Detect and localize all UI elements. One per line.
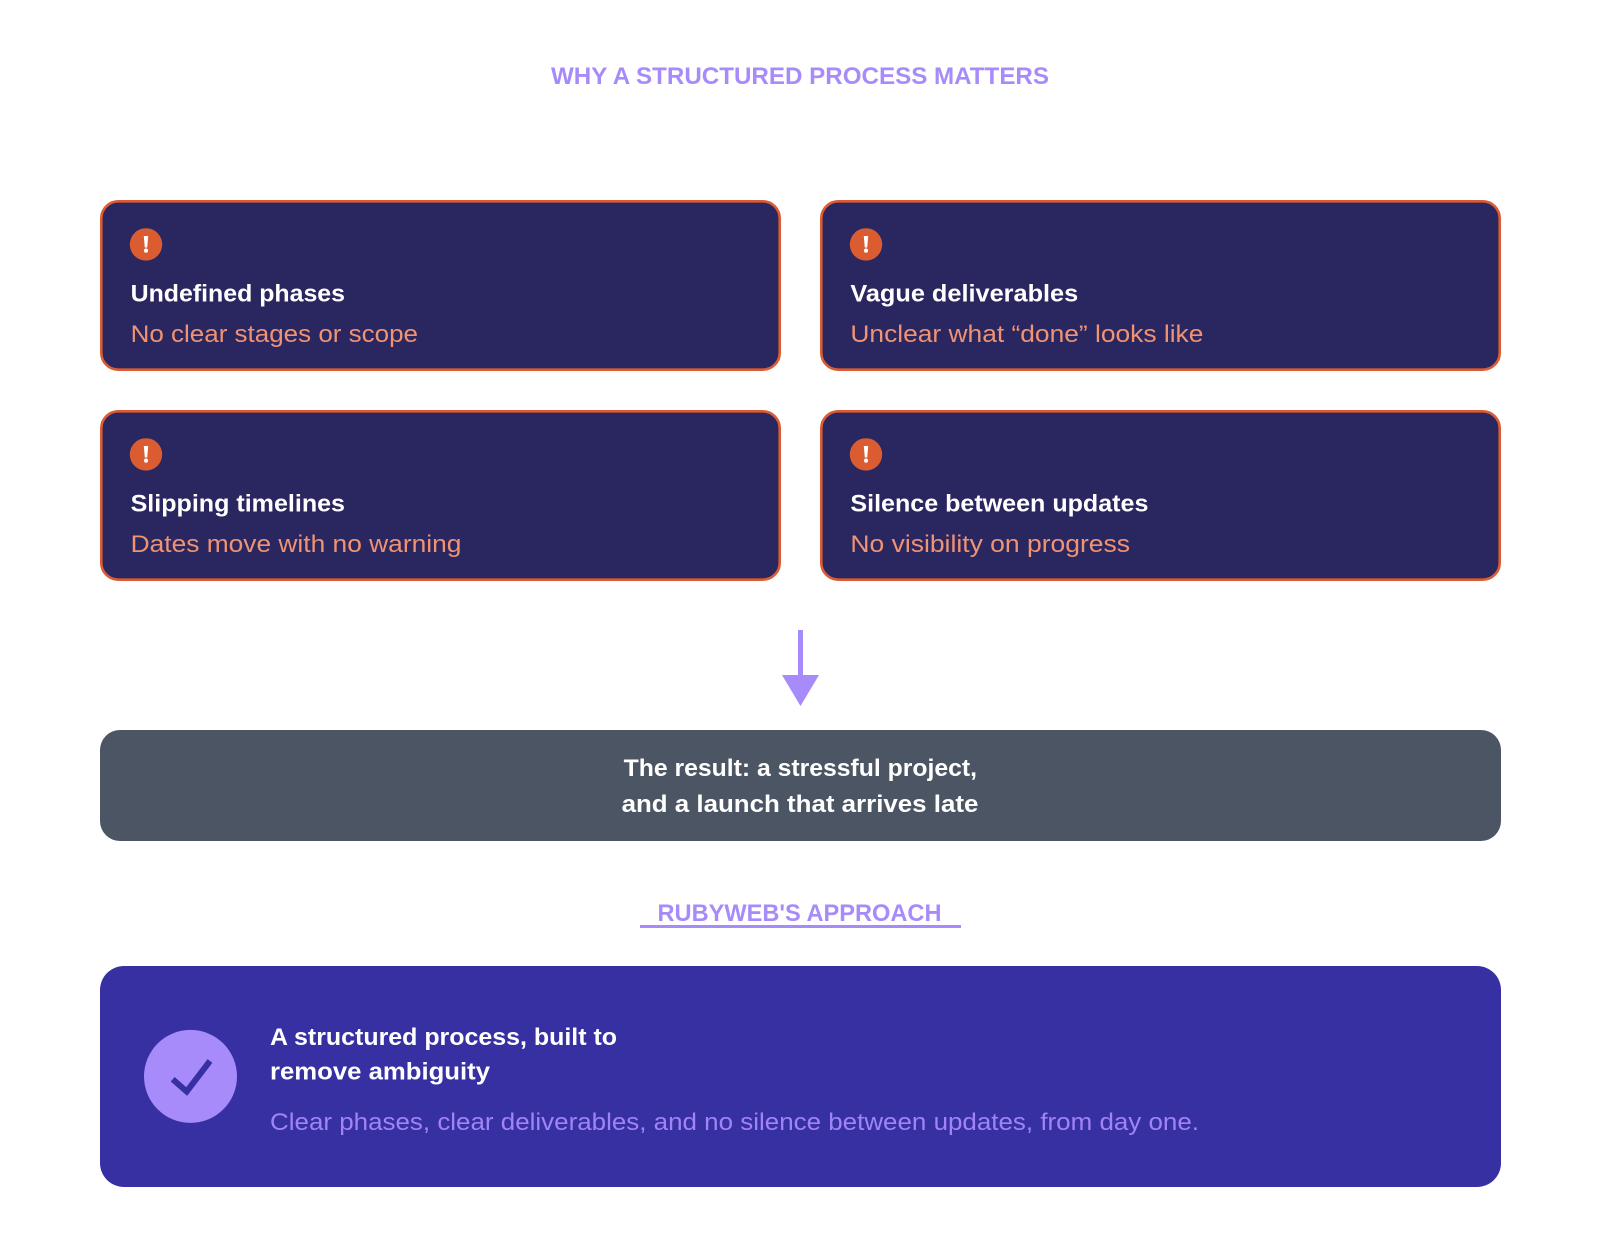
heading: Undefined phases [131, 281, 345, 308]
title: WHY A STRUCTURED PROCESS MATTERS [551, 63, 1049, 90]
panel: vague deliverables [821, 201, 1500, 370]
panel description: Clear phases, clear deliverables, and no silence between updates, from day one. [270, 1109, 1199, 1136]
panel: undefined phases [101, 201, 780, 370]
icon: warning [850, 438, 882, 471]
result banner [100, 730, 1501, 841]
arrow [782, 630, 819, 706]
section heading: approach: RUBYWEB'S APPROACH [658, 900, 942, 927]
result text [622, 755, 978, 818]
icon: check [144, 1030, 237, 1123]
heading: Silence between updates [850, 491, 1148, 518]
panel heading [270, 1024, 617, 1086]
icon: warning [850, 228, 882, 261]
panel: structured process [100, 966, 1501, 1187]
description: Dates move with no warning [131, 531, 461, 558]
icon: warning [130, 228, 162, 261]
panel heading: remove ambiguity [270, 1058, 491, 1086]
panel: slipping timelines [101, 411, 780, 580]
panel heading: A structured process, built to [270, 1024, 617, 1051]
icon: warning [130, 438, 162, 471]
heading: Slipping timelines [131, 491, 345, 518]
panel: silence between updates [821, 411, 1500, 580]
description: No visibility on progress [850, 531, 1130, 558]
description: Unclear what “done” looks like [850, 321, 1203, 348]
result text: and a launch that arrives late [622, 791, 978, 818]
heading: Vague deliverables [850, 281, 1078, 308]
result text: The result: a stressful project, [624, 755, 977, 782]
description: No clear stages or scope [131, 321, 418, 348]
